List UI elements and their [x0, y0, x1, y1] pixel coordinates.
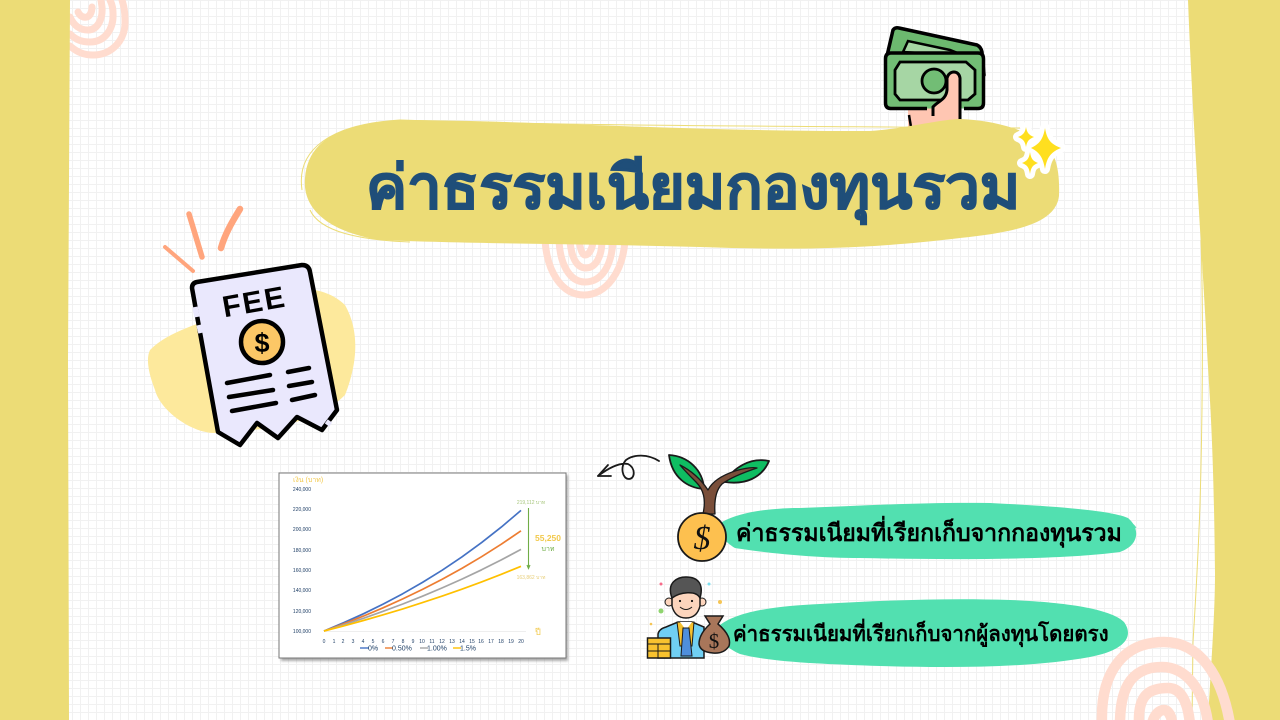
chart x axis: 18	[498, 639, 504, 645]
chart panel	[279, 473, 568, 661]
chart annotations: ปี	[535, 627, 541, 637]
icon: plant	[669, 455, 769, 514]
teal banner 2	[718, 599, 1128, 667]
icon: burst lines	[165, 209, 240, 271]
chart legend: 1.00%	[427, 646, 447, 652]
icon: fee receipt	[192, 265, 337, 445]
chart lines	[324, 510, 521, 631]
fee label: FEE	[220, 281, 289, 324]
chart x axis: 15	[469, 639, 475, 645]
chart x axis: 1	[333, 639, 336, 645]
chart x axis: 3	[352, 639, 355, 645]
chart y axis labels: 100,000	[293, 629, 311, 635]
label: fund-level fee: ค่าธรรมเนียมที่เรียกเก็บจากกองทุนรวม	[736, 520, 1122, 547]
yellow blob behind fee icon	[148, 289, 355, 433]
left yellow border	[0, 0, 70, 720]
title: ค่าธรรมเนียมกองทุนรวม	[366, 154, 1020, 221]
right yellow border	[1188, 0, 1280, 720]
chart legend: 0.50%	[392, 646, 412, 652]
chart y axis labels: 180,000	[293, 548, 311, 554]
chart y axis labels: 200,000	[293, 527, 311, 533]
icon: money and hand	[886, 28, 984, 130]
icon: investor	[648, 577, 730, 658]
chart y axis labels: 240,000	[293, 487, 311, 493]
chart y axis labels: 220,000	[293, 507, 311, 513]
chart x axis: 6	[382, 639, 385, 645]
chart legend: 1.5%	[460, 646, 476, 652]
chart x axis: 8	[402, 639, 405, 645]
label: investor-level fee: ค่าธรรมเนียมที่เรียกเก็บจากผู้ลงทุนโดยตรง	[733, 622, 1109, 646]
chart axis title: เงิน (บาท)	[293, 476, 323, 484]
teal banner 1	[720, 503, 1136, 559]
chart x axis: 11	[429, 639, 435, 645]
chart annotations	[517, 500, 561, 637]
chart y axis labels: 160,000	[293, 568, 311, 574]
dollar sign: $	[254, 328, 270, 358]
title banner	[301, 119, 1059, 249]
chart x axis: 12	[439, 639, 445, 645]
chart y axis labels: 120,000	[293, 609, 311, 615]
icon: coin	[678, 513, 726, 561]
chart annotations: 55,250	[535, 533, 561, 543]
icon: sparkles	[1018, 127, 1061, 174]
decoration: fingerprint arcs bottom right	[1102, 642, 1230, 720]
chart y axis labels: 140,000	[293, 588, 311, 594]
chart x axis: 17	[488, 639, 494, 645]
chart annotations: 219,112 บาท	[517, 500, 545, 506]
chart annotations: บาท	[542, 546, 555, 553]
chart x axis: 7	[392, 639, 395, 645]
chart x axis: 10	[419, 639, 425, 645]
chart x axis: 5	[372, 639, 375, 645]
chart x axis: 16	[478, 639, 484, 645]
chart legend: 0%	[368, 646, 378, 652]
chart x axis: 9	[412, 639, 415, 645]
chart x axis: 20	[518, 639, 524, 645]
chart x axis: 4	[362, 639, 365, 645]
decoration: fingerprint arcs behind title	[545, 240, 625, 295]
chart legend	[360, 646, 476, 652]
chart y axis labels	[293, 487, 311, 635]
chart x axis: 13	[449, 639, 455, 645]
icon: coin: $	[694, 520, 710, 557]
chart x axis: 19	[508, 639, 514, 645]
chart x axis: 14	[459, 639, 465, 645]
chart difference arrow	[527, 508, 530, 568]
right thin page outline	[1192, 240, 1202, 720]
chart x axis	[323, 632, 526, 645]
icon: investor: $	[709, 629, 719, 653]
chart x axis: 0	[323, 639, 326, 645]
chart annotations: 163,862 บาท	[517, 575, 545, 581]
arrow to chart	[598, 456, 659, 479]
chart x axis: 2	[342, 639, 345, 645]
decoration: fingerprint arcs top left	[70, 0, 125, 55]
